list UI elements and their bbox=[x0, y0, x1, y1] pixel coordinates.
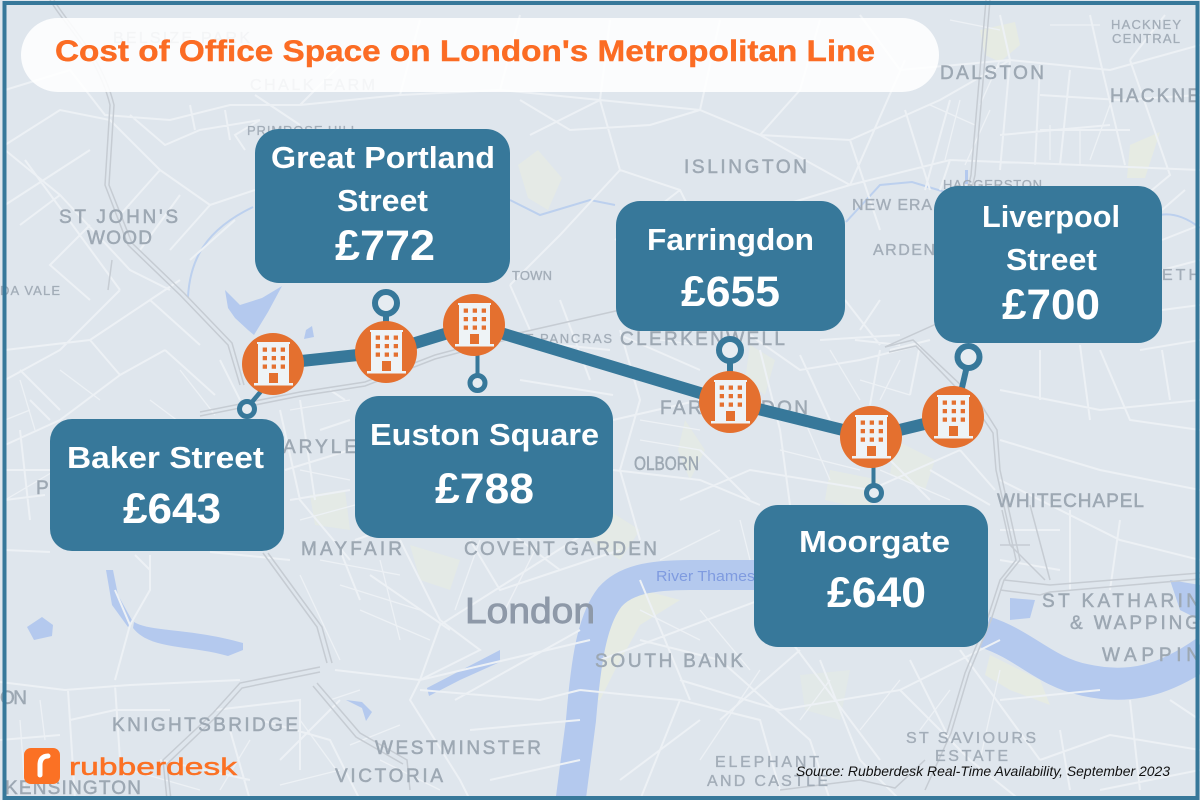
place labels: PRIMROSE HILL bbox=[247, 123, 358, 138]
place labels: HAGGERSTON bbox=[943, 177, 1042, 192]
place labels: P bbox=[36, 478, 49, 499]
icon: Baker Street building bbox=[242, 333, 304, 395]
place labels: ST PANCRAS bbox=[515, 331, 612, 346]
title: Cost of Office Space on London's Metropolitan Line bbox=[55, 35, 875, 68]
panel: Farringdon: Farringdon bbox=[647, 222, 814, 257]
panel: Euston Square bbox=[355, 396, 613, 538]
icon: Euston Square building bbox=[443, 294, 505, 356]
place labels: FARRINGDON bbox=[660, 398, 808, 419]
built-up areas bbox=[310, 22, 1160, 720]
source note: Source: Rubberdesk Real-Time Availability, September 2023 bbox=[796, 763, 1170, 779]
icon: Farringdon building bbox=[699, 371, 761, 433]
place labels: WAPPIN bbox=[1102, 645, 1200, 666]
place labels: AND CASTLE bbox=[707, 773, 828, 790]
panel: Liverpool Street: £700 bbox=[1002, 281, 1100, 329]
place labels: BELSIZE PARK bbox=[113, 30, 250, 47]
panel: Moorgate bbox=[754, 505, 988, 647]
pin: Great Portland Street bbox=[375, 292, 397, 328]
place labels: OLBORN bbox=[634, 454, 699, 475]
place labels: CHALK FARM bbox=[250, 77, 375, 94]
panel: Great Portland Street bbox=[255, 129, 510, 283]
panel: Baker Street: Baker Street bbox=[67, 440, 264, 475]
panel: Moorgate: Moorgate bbox=[799, 524, 950, 559]
panel: Euston Square: Euston Square bbox=[370, 417, 599, 452]
panel: Liverpool Street: Liverpool bbox=[982, 199, 1120, 234]
place labels: River Thames bbox=[656, 568, 755, 585]
place labels: ETH bbox=[1162, 267, 1200, 284]
place labels: WESTMINSTER bbox=[375, 738, 541, 759]
metropolitan line route bbox=[273, 325, 953, 437]
place labels: ARDEN bbox=[873, 242, 935, 259]
pin: Baker Street bbox=[240, 390, 262, 416]
place labels: KENSINGTON bbox=[5, 778, 141, 799]
logo: rubberdesk bbox=[24, 748, 238, 784]
place labels: CLERKENWELL bbox=[620, 329, 785, 350]
icon: Great Portland Street building bbox=[355, 321, 417, 383]
panel: Great Portland Street: Street bbox=[337, 183, 428, 218]
place labels: DALSTON bbox=[940, 63, 1044, 84]
panel: Baker Street bbox=[50, 419, 284, 551]
place labels: ISLINGTON bbox=[684, 157, 807, 178]
place labels: WOOD bbox=[87, 228, 152, 249]
place labels: ST SAVIOURS bbox=[906, 730, 1036, 747]
place labels: HACKNE bbox=[1110, 86, 1200, 107]
place labels: TOWN bbox=[512, 268, 552, 283]
icon: Moorgate building bbox=[840, 406, 902, 468]
panel: Moorgate: £640 bbox=[827, 569, 926, 617]
panel: Baker Street: £643 bbox=[123, 485, 221, 533]
place labels: CENTRAL bbox=[1112, 31, 1180, 46]
pin: Euston Square bbox=[470, 350, 485, 390]
place labels: WHITECHAPEL bbox=[997, 491, 1144, 512]
panel: Liverpool Street: Street bbox=[1006, 242, 1097, 277]
place labels: ARYLE bbox=[283, 437, 357, 458]
place labels: ELEPHANT bbox=[715, 754, 819, 771]
icon: Liverpool Street building bbox=[922, 386, 984, 448]
place labels: ESTATE bbox=[935, 748, 1008, 765]
pin: Moorgate bbox=[866, 462, 882, 500]
place labels: London bbox=[465, 590, 595, 631]
place labels: ON bbox=[0, 688, 27, 709]
pin: Liverpool Street bbox=[958, 346, 980, 392]
panel: Great Portland Street: £772 bbox=[335, 222, 435, 270]
place labels: NEW ERA bbox=[852, 197, 932, 214]
River Thames bbox=[570, 575, 1200, 800]
panel: Farringdon bbox=[616, 201, 845, 331]
lakes and canals bbox=[27, 170, 1200, 721]
place labels: COVENT GARDEN bbox=[464, 539, 657, 560]
logo: rubberdesk: rubberdesk bbox=[69, 754, 238, 781]
place labels: ST JOHN'S bbox=[59, 207, 178, 228]
place labels: KNIGHTSBRIDGE bbox=[112, 715, 298, 736]
place labels: & WAPPING bbox=[1070, 613, 1200, 634]
panel: Farringdon: £655 bbox=[681, 268, 780, 316]
panel: Great Portland Street: Great Portland bbox=[271, 140, 495, 175]
pin: Farringdon bbox=[719, 339, 741, 376]
place labels: SOUTH BANK bbox=[595, 651, 743, 672]
place labels: VICTORIA bbox=[335, 766, 443, 787]
panel: Liverpool Street bbox=[934, 186, 1162, 343]
panel: Euston Square: £788 bbox=[435, 465, 534, 513]
canal lines bbox=[188, 182, 1200, 297]
place labels: DA VALE bbox=[0, 283, 60, 298]
title banner bbox=[21, 18, 939, 92]
place labels: HACKNEY bbox=[1111, 17, 1181, 32]
place labels: ST KATHARIN bbox=[1042, 591, 1200, 612]
place labels: MAYFAIR bbox=[301, 539, 402, 560]
